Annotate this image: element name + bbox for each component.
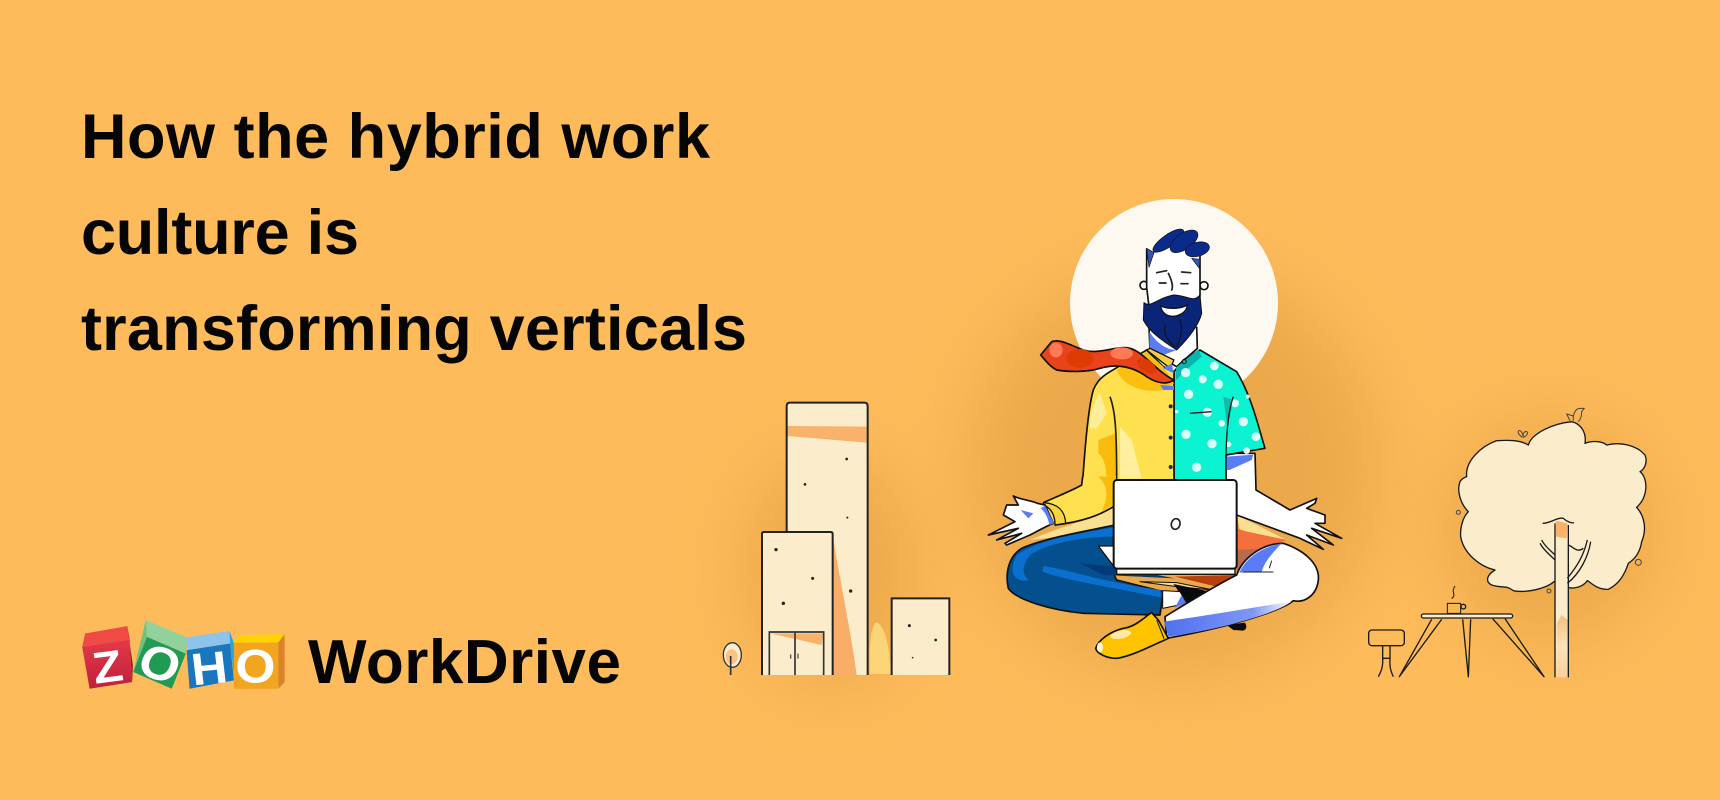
tie [1041,341,1174,383]
shorts [1237,528,1287,575]
teal shirt half [1174,349,1265,482]
arms behind torso [1030,453,1342,549]
icon: Zoho cubes: Z [89,641,126,693]
title: transforming verticals [81,294,747,364]
illustration: tree, table and stool [1369,408,1646,677]
stool [1369,630,1404,677]
bird and leaves [1456,408,1641,593]
face details [1157,271,1191,290]
ears [1140,281,1208,290]
small tree [723,643,741,675]
door [769,632,824,675]
tree crown [1459,422,1646,591]
title: culture is [81,198,359,268]
yellow shrub [870,623,891,674]
torso and head [1041,225,1265,482]
coffee cup [1447,586,1466,613]
hair [1150,225,1211,259]
yellow shirt half [1083,348,1174,482]
head [1140,225,1211,350]
lower body and laptop [988,477,1318,658]
table [1399,614,1544,677]
tall building [787,403,868,675]
yellow sock [1096,613,1168,658]
small building [892,598,949,675]
black shoe [1227,623,1246,631]
logo: Zoho WorkDrive [82,620,621,697]
illustration: buildings [723,403,949,675]
blue sleeve shade [1227,455,1253,470]
icon: Zoho cubes [82,620,285,696]
laptop [1098,480,1237,574]
title: How the hybrid work [81,102,711,172]
sun circle [1070,199,1278,407]
icon: Zoho cubes: O [235,641,276,693]
icon: Zoho cubes: H [189,642,230,696]
icon: Zoho cubes: O [131,633,189,695]
wordmark: WorkDrive [308,628,621,697]
middle building [762,532,833,675]
crossed leg: jeans [1007,525,1163,615]
tan shadow behind arms [1030,505,1287,540]
white leg [1165,543,1318,638]
beard [1143,295,1202,350]
neck [1149,327,1197,367]
right arm [1226,453,1342,549]
left hand [988,496,1053,545]
title [81,102,747,364]
sock peek [1163,591,1187,608]
illustration: meditating man [988,199,1342,658]
tree trunk and branches [1540,518,1591,677]
yellow forearm [1043,477,1116,525]
